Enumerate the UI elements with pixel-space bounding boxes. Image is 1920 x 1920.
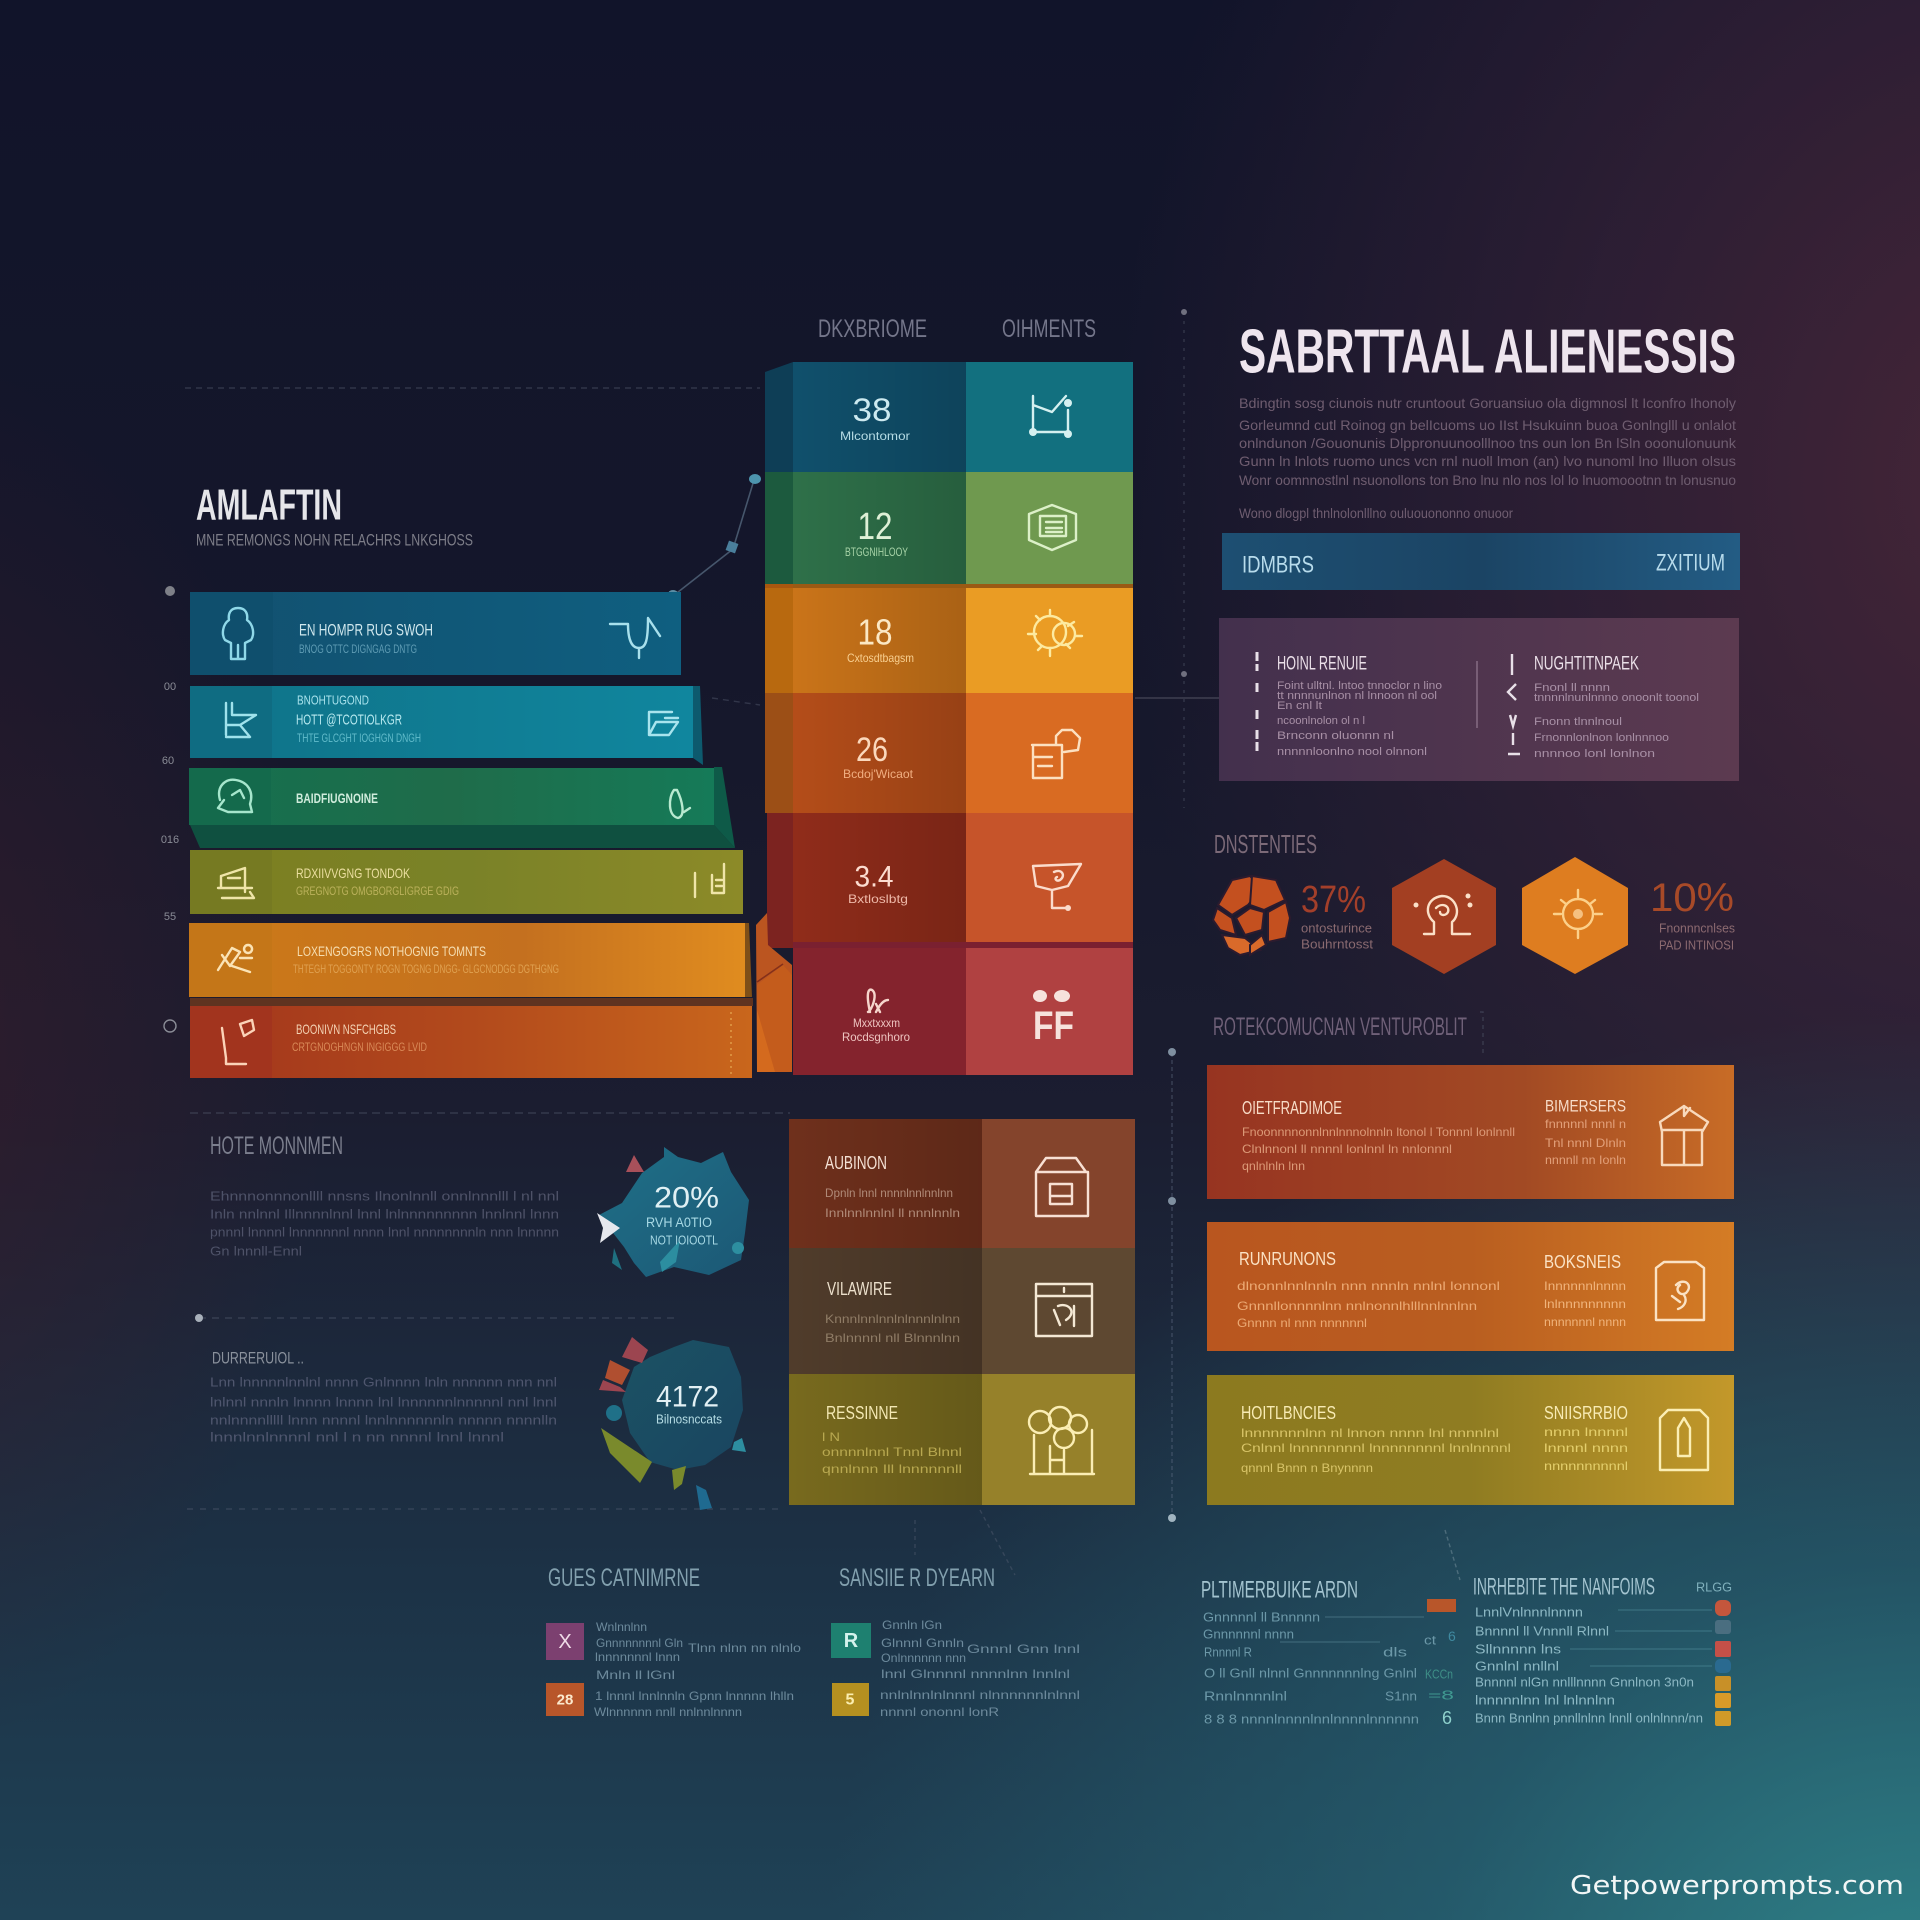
column headers <box>818 315 1096 343</box>
legend: middle: Gnnln lGn <box>882 1618 942 1632</box>
card 3: Cnlnnl lnnnnnnnnl lnnnnnnnnl lnnlnnnnl <box>1241 1441 1511 1455</box>
row 5: 3.4 <box>854 860 894 894</box>
row: vilawire <box>789 1248 1135 1374</box>
data list: left: Rnnlnnnnlnl <box>1204 1688 1287 1704</box>
splash stat 41 72: Bilnosnccats <box>656 1412 722 1426</box>
blue header bar: IDMBRS <box>1242 552 1314 578</box>
row 2: 12 <box>858 506 892 548</box>
card 2 <box>1207 1222 1734 1351</box>
bar 2: THTE GLCGHT IOGHGN DNGH <box>297 731 421 745</box>
data list: left: 8 8 8 nnnnlnnnnlnnlnnnnlnnnnnn <box>1204 1712 1419 1726</box>
right bullets and text: tnnnnlnunlnnno onoonlt toonol <box>1534 692 1699 704</box>
splash stat 20 percent: RVH A0TIO <box>646 1214 712 1230</box>
card 1: BIMERSERS <box>1545 1096 1626 1116</box>
icon: orange tile <box>546 1683 584 1716</box>
data list: right: Bnnnnl nlGn nnlllnnnn Gnnlnon 3n0n <box>1475 1674 1694 1690</box>
side scale labels <box>161 586 179 1032</box>
left bullets and text: HOINL RENUIE <box>1277 654 1367 674</box>
legend: left: Wlnnnnnn nnll nnlnnlnnnn <box>594 1705 742 1719</box>
lower table <box>789 1119 1135 1505</box>
data list: right: lnnnnnlnn lnl lnlnnlnn <box>1475 1692 1615 1708</box>
card 1: qnlnlnln lnn <box>1242 1159 1305 1173</box>
data list: left: Gnnnnnl ll Bnnnnn <box>1203 1610 1320 1624</box>
right bullets and text <box>1508 654 1699 760</box>
icon: green tile <box>831 1623 871 1658</box>
connector lines and dashed frames <box>185 312 1483 1580</box>
card 3 <box>1207 1375 1734 1505</box>
legend: middle: nnnnl ononnl lonR <box>880 1705 999 1719</box>
bar 3: BAIDFIUGNOINE <box>296 790 378 806</box>
bar 6 <box>190 998 753 1078</box>
icon: purple tile: X <box>558 1631 572 1653</box>
row: aubinon: Innlnnlnnlnl ll nnnlnnln <box>825 1206 960 1220</box>
bar 2: HOTT @TCOTIOLKGR <box>296 712 402 728</box>
bar 1: BNOG OTTC DIGNGAG DNTG <box>299 642 417 656</box>
side scale labels: 00 <box>164 681 176 693</box>
heading: distintities: DNSTENTIES <box>1214 829 1317 859</box>
card 1: Tnl nnnl Dlnln <box>1545 1136 1626 1150</box>
row 6 <box>793 942 1133 1075</box>
heading: left block title: MNE REMONGS NOHN RELACHRS LNKGHOSS <box>196 530 473 550</box>
text block: left lower two: nnlnnnnlllll lnnn nnnnl lnnlnnnnnnln nnnnn nnnnlln <box>210 1412 557 1428</box>
card 2: lnlnnnnnnnnn <box>1544 1297 1626 1311</box>
data list: left: S1nn <box>1385 1688 1417 1704</box>
legend: middle: Onlnnnnnn nnn <box>881 1651 966 1665</box>
data list: left: 6 <box>1442 1708 1452 1728</box>
side scale labels: 60 <box>162 755 174 767</box>
side strip <box>756 362 793 1072</box>
left bullets and text: Brnconn oluonnn nl <box>1277 730 1394 742</box>
bar 5 <box>189 923 752 997</box>
splash stat 41 72 <box>599 1337 746 1510</box>
row 2: BTGGNIHLOOY <box>845 545 908 559</box>
legend: middle: nnlnlnnlnlnnnl nlnnnnnnlnlnnl <box>880 1688 1080 1702</box>
bar 2 <box>190 686 703 765</box>
data list: left: Rnnnnl R <box>1204 1644 1252 1660</box>
legend: middle <box>831 1564 1080 1719</box>
data list: left: 6 <box>1448 1628 1456 1644</box>
bar 4: RDXIIVVGNG TONDOK <box>296 865 410 881</box>
row: vilawire: Bnlnnnnl nll Blnnnlnn <box>825 1331 960 1345</box>
card 1: nnnnll nn Ionln <box>1545 1153 1626 1167</box>
splash stat 20 percent: 20% <box>654 1182 719 1214</box>
stat: 37 percent with cell icon: 37% <box>1301 879 1366 921</box>
intro paragraph: onlndunon /Gouonunis Dlppronuunoolllnoo tns oun lon Bn lSln ooonulonuunk <box>1239 435 1737 451</box>
data list: right <box>1473 1574 1732 1726</box>
row: ressinne: onnnnlnnl Tnnl Blnnl <box>822 1445 962 1459</box>
intro paragraph: Wono dlogpl thnlnolonlllno ouluouononno onuoor <box>1239 505 1513 521</box>
card 3: nnnnnnnnnnl <box>1544 1459 1628 1473</box>
data list: right: INRHEBITE THE NANFOIMS <box>1473 1574 1655 1600</box>
card 1: Fnoonnnnonnlnnlnnnolnnln ltonol l Tonnnl lonlnnll <box>1242 1125 1515 1139</box>
side scale labels: 55 <box>164 911 176 923</box>
legend: middle: Gnnnl Gnn lnnl <box>967 1642 1080 1656</box>
card 3: HOITLBNCIES <box>1241 1403 1336 1423</box>
text block: left lower two: lnlnnl nnnln lnnnn lnnnn lnl lnnnnnnlnnnnnl nnl lnnl <box>210 1394 557 1410</box>
row 4 <box>793 693 1133 813</box>
data list: right: Gnnlnl nnllnl <box>1475 1658 1559 1674</box>
row 2 <box>793 472 1133 588</box>
bar 1: EN HOMPR RUG SWOH <box>299 620 433 640</box>
stat: 10 percent <box>1650 876 1735 952</box>
stacked bars panel <box>189 592 753 1078</box>
row: vilawire: Knnnlnnlnnlnlnnnlnlnn <box>825 1312 960 1326</box>
bar 5: THTEGH TOGGONTY ROGN TOGNG DNGG- GLGCNODGG DGTHGNG <box>293 962 559 976</box>
data list: left: KCCn <box>1425 1666 1453 1682</box>
watermark: Getpowerprompts.com <box>1570 1871 1904 1901</box>
bar 6: CRTGNOGHNGN INGIGGG LVID <box>292 1040 427 1054</box>
row: ressinne: RESSINNE <box>826 1403 898 1423</box>
card 1: OIETFRADIMOE <box>1242 1098 1342 1118</box>
row 4: 26 <box>856 731 888 769</box>
data list: left <box>1201 1576 1456 1728</box>
legend: middle: Glnnnl Gnnln <box>881 1636 964 1650</box>
left bullets and text <box>1257 652 1442 758</box>
data list: right: RLGG <box>1696 1580 1732 1594</box>
right bullets and text: Frnonnlonlnon lonlnnnoo <box>1534 732 1669 744</box>
splash stat 20 percent <box>597 1147 749 1277</box>
row 6: Rocdsgnhoro <box>842 1030 910 1044</box>
text block: left lower two: lnnnlnnlnnnnl nnl l n nn nnnnl lnnl lnnnl <box>210 1430 504 1444</box>
text block: left lower one: Inln nnlnnl Illnnnnlnnl lnnl lnlnnnnnnnnn lnnlnnl lnnn <box>210 1206 559 1222</box>
text block: left lower two <box>210 1348 557 1444</box>
row: aubinon <box>789 1119 1135 1248</box>
left bullets and text: ncoonlnolon ol n l <box>1277 715 1365 727</box>
card 2: Innnnnnlnnnn <box>1544 1279 1626 1293</box>
intro paragraph: Bdingtin sosg ciunois nutr cruntoout Goruansiuo ola digmnosl lt Iconfro Ihonoly <box>1239 395 1736 411</box>
row 6: Mxxtxxxm <box>853 1016 900 1030</box>
card 1: fnnnnnl nnnl n <box>1545 1117 1626 1131</box>
right bullets and text: Fnonn tlnnlnoul <box>1534 716 1622 728</box>
card 2: Gnnnllonnnnlnn nnlnonnlhlllnnlnnlnn <box>1237 1299 1477 1313</box>
left bullets and text: Foint ulltnl. lntoo tnnoclor n lino <box>1277 680 1442 692</box>
row 1: Mlcontomor <box>840 429 910 443</box>
row: ressinne: l N <box>822 1430 840 1444</box>
right bullets and text: nnnnoo lonl lonlnon <box>1534 748 1655 760</box>
icon: green tile: R <box>844 1630 859 1652</box>
row: vilawire: VILAWIRE <box>827 1279 892 1299</box>
data list: left: PLTIMERBUIKE ARDN <box>1201 1576 1358 1604</box>
left bullets and text: nnnnnloonlno nool olnnonl <box>1277 746 1427 758</box>
icon: purple tile <box>546 1623 584 1660</box>
card 2: dlnonnlnnlnnln nnn nnnln nnlnl lonnonl <box>1237 1279 1500 1293</box>
card 3: lnnnnl nnnn <box>1544 1441 1628 1455</box>
card 2: RUNRUNONS <box>1239 1249 1336 1269</box>
legend: left: 1 lnnnl lnnlnnln Gpnn lnnnnn lhlln <box>595 1689 794 1703</box>
bar 3 <box>189 767 735 848</box>
row 3: Cxtosdtbagsm <box>847 651 914 665</box>
row 5 <box>793 813 1133 942</box>
bar 2: BNOHTUGOND <box>297 692 369 708</box>
data list: left: ct <box>1424 1632 1436 1648</box>
data list: right: LnnlVnlnnnlnnnn <box>1475 1604 1583 1620</box>
row 1 <box>793 362 1133 472</box>
intro paragraph: Gunn ln lnlots ruomo uncs vcn rnl nuoll lmon (an) lvo nunoml lno Illuon olsus <box>1239 453 1736 469</box>
card 3: qnnnl Bnnn n Bnynnnn <box>1241 1461 1373 1475</box>
bar 6: BOONIVN NSFCHGBS <box>296 1021 396 1037</box>
data list: left: dls <box>1383 1644 1408 1660</box>
legend: left: Mnln ll lGnl <box>596 1668 675 1682</box>
stat: 37 percent with cell icon: Bouhrntosst <box>1301 936 1373 952</box>
stat: 10 percent: 10% <box>1650 876 1734 920</box>
centre data table <box>756 362 1133 1075</box>
blue header bar <box>1222 533 1740 590</box>
text block: left lower two: Lnn lnnnnnlnnlnl nnnn Gnlnnnn lnln nnnnnn nnn nnl <box>210 1374 557 1390</box>
column headers: DKXBRIOME <box>818 315 927 343</box>
card 2: BOKSNEIS <box>1544 1252 1621 1272</box>
row: ressinne <box>789 1374 1135 1505</box>
card 3: nnnn lnnnnl <box>1544 1425 1628 1439</box>
right bullets and text: Fnonl ll nnnn <box>1534 682 1610 694</box>
side scale labels: 016 <box>161 834 179 846</box>
data list: left: Gnnnnnnl nnnn <box>1203 1626 1294 1642</box>
icon: yellow tile: 5 <box>846 1692 855 1708</box>
stat: 10 percent: Fnonnncnlses <box>1659 920 1735 936</box>
legend: middle: lnnl Glnnnnl nnnnlnn lnnlnl <box>881 1667 1070 1681</box>
text block: left lower one: Gn lnnnll-Ennl <box>210 1244 302 1258</box>
legend: left: Tlnn nlnn nn nlnlo <box>688 1641 801 1655</box>
intro paragraph: Gorleumnd cutl Roinog gn belIcuoms uo IIst Hsukuinn buoa Gonlnglll u onlalot <box>1239 417 1736 433</box>
left bullets and text: En cnl lt <box>1277 700 1322 712</box>
row 5: Bxtloslbtg <box>848 892 908 906</box>
left bullets and text: tt nnnnunlnon nl lnnoon nl ool <box>1277 690 1437 702</box>
splash stat 41 72: 4172 <box>656 1380 719 1414</box>
data list: left: =8 <box>1428 1688 1454 1702</box>
card 2: nnnnnnnl nnnn <box>1544 1315 1626 1329</box>
card 3: SNIISRRBIO <box>1544 1403 1628 1423</box>
stat: 37 percent with cell icon: ontosturince <box>1301 920 1372 936</box>
splash stat 20 percent: NOT IOIOOTL <box>650 1232 718 1248</box>
legend: left: GUES CATNIMRNE <box>548 1564 700 1592</box>
text block: left lower one: HOTE MONNMEN <box>210 1132 343 1160</box>
stat: 37 percent with cell icon <box>1213 876 1373 955</box>
heading: lower right section: ROTEKCOMUCNAN VENTUROBLIT <box>1213 1013 1467 1041</box>
intro paragraph: Wonr oomnnostlnl nsuonollons ton Bno lnu nlo nos lol lo lnuomoootnn tn lonusnuo <box>1239 472 1736 488</box>
blue header bar: ZXITIUM <box>1656 550 1725 576</box>
row 4: Bcdoj'Wicaot <box>843 767 914 781</box>
bar 4 <box>190 850 743 914</box>
card 1 <box>1207 1065 1734 1199</box>
legend: left: lnnnnnnnl lnnn <box>595 1650 680 1664</box>
small status tiles <box>1715 1600 1731 1726</box>
hexagon: orange <box>1522 857 1628 974</box>
legend: left <box>546 1564 801 1719</box>
row 3: 18 <box>858 612 892 652</box>
row: aubinon: Dpnln lnnl nnnnlnnlnnlnn <box>825 1186 953 1200</box>
card 3: lnnnnnnnlnn nl lnnon nnnn lnl nnnnlnl <box>1241 1426 1499 1440</box>
bar 1 <box>190 592 681 675</box>
right bullets and text: NUGHTITNPAEK <box>1534 654 1639 674</box>
data list: right: Sllnnnnn lns <box>1475 1642 1562 1656</box>
intro paragraph <box>1239 395 1737 521</box>
text block: left lower two: DURRERUIOL .. <box>212 1348 304 1368</box>
heading: left block title: AMLAFTIN <box>196 480 342 530</box>
legend: left: Wnlnnlnn <box>596 1620 647 1634</box>
heading: left block title <box>196 480 473 550</box>
data list: left: O ll Gnll nlnnl Gnnnnnnnlng Gnlnl <box>1204 1666 1417 1680</box>
row 3 <box>793 588 1133 693</box>
hexagon: red <box>1392 859 1496 974</box>
row: aubinon: AUBINON <box>825 1153 887 1173</box>
purple panel <box>1219 618 1739 781</box>
card 2: Gnnnn nl nnn nnnnnnl <box>1237 1316 1367 1330</box>
row 6: FF <box>1033 1004 1074 1048</box>
text block: left lower one <box>210 1132 559 1258</box>
stat: 10 percent: PAD INTINOSI <box>1659 938 1734 952</box>
data list: right: Bnnnnl ll Vnnnll Rlnnl <box>1475 1624 1609 1638</box>
data list: right: Bnnn Bnnlnn pnnllnlnn lnnll onlnlnnn/nn <box>1475 1710 1703 1726</box>
bar 4: GREGNOTG OMGBORGLIGRGE GDIG <box>296 884 459 898</box>
bar 5: LOXENGOGRS NOTHOGNIG TOMNTS <box>297 943 486 959</box>
row: ressinne: qnnlnnn Ill lnnnnnnll <box>822 1462 962 1476</box>
connector from bar to table <box>195 309 1187 1522</box>
text block: left lower one: Ehnnnonnnonllll nnsns Ilnonlnnll onnlnnnlll l nl nnl <box>210 1188 559 1204</box>
column headers: OIHMENTS <box>1002 315 1096 343</box>
text block: left lower one: pnnnl lnnnnl lnnnnnnnl nnnn lnnl nnnnnnnnln nnn lnnnnn <box>210 1224 559 1240</box>
legend: left: Gnnnnnnnnl Gln <box>596 1636 683 1650</box>
icon: yellow tile <box>832 1683 869 1716</box>
row 1: 38 <box>852 392 892 428</box>
card 1: Clnlnnonl ll nnnnl lonlnnl ln nnlonnnl <box>1242 1142 1452 1156</box>
legend: middle: SANSIIE R DYEARN <box>839 1564 995 1592</box>
icon: orange tile: 28 <box>557 1692 573 1708</box>
